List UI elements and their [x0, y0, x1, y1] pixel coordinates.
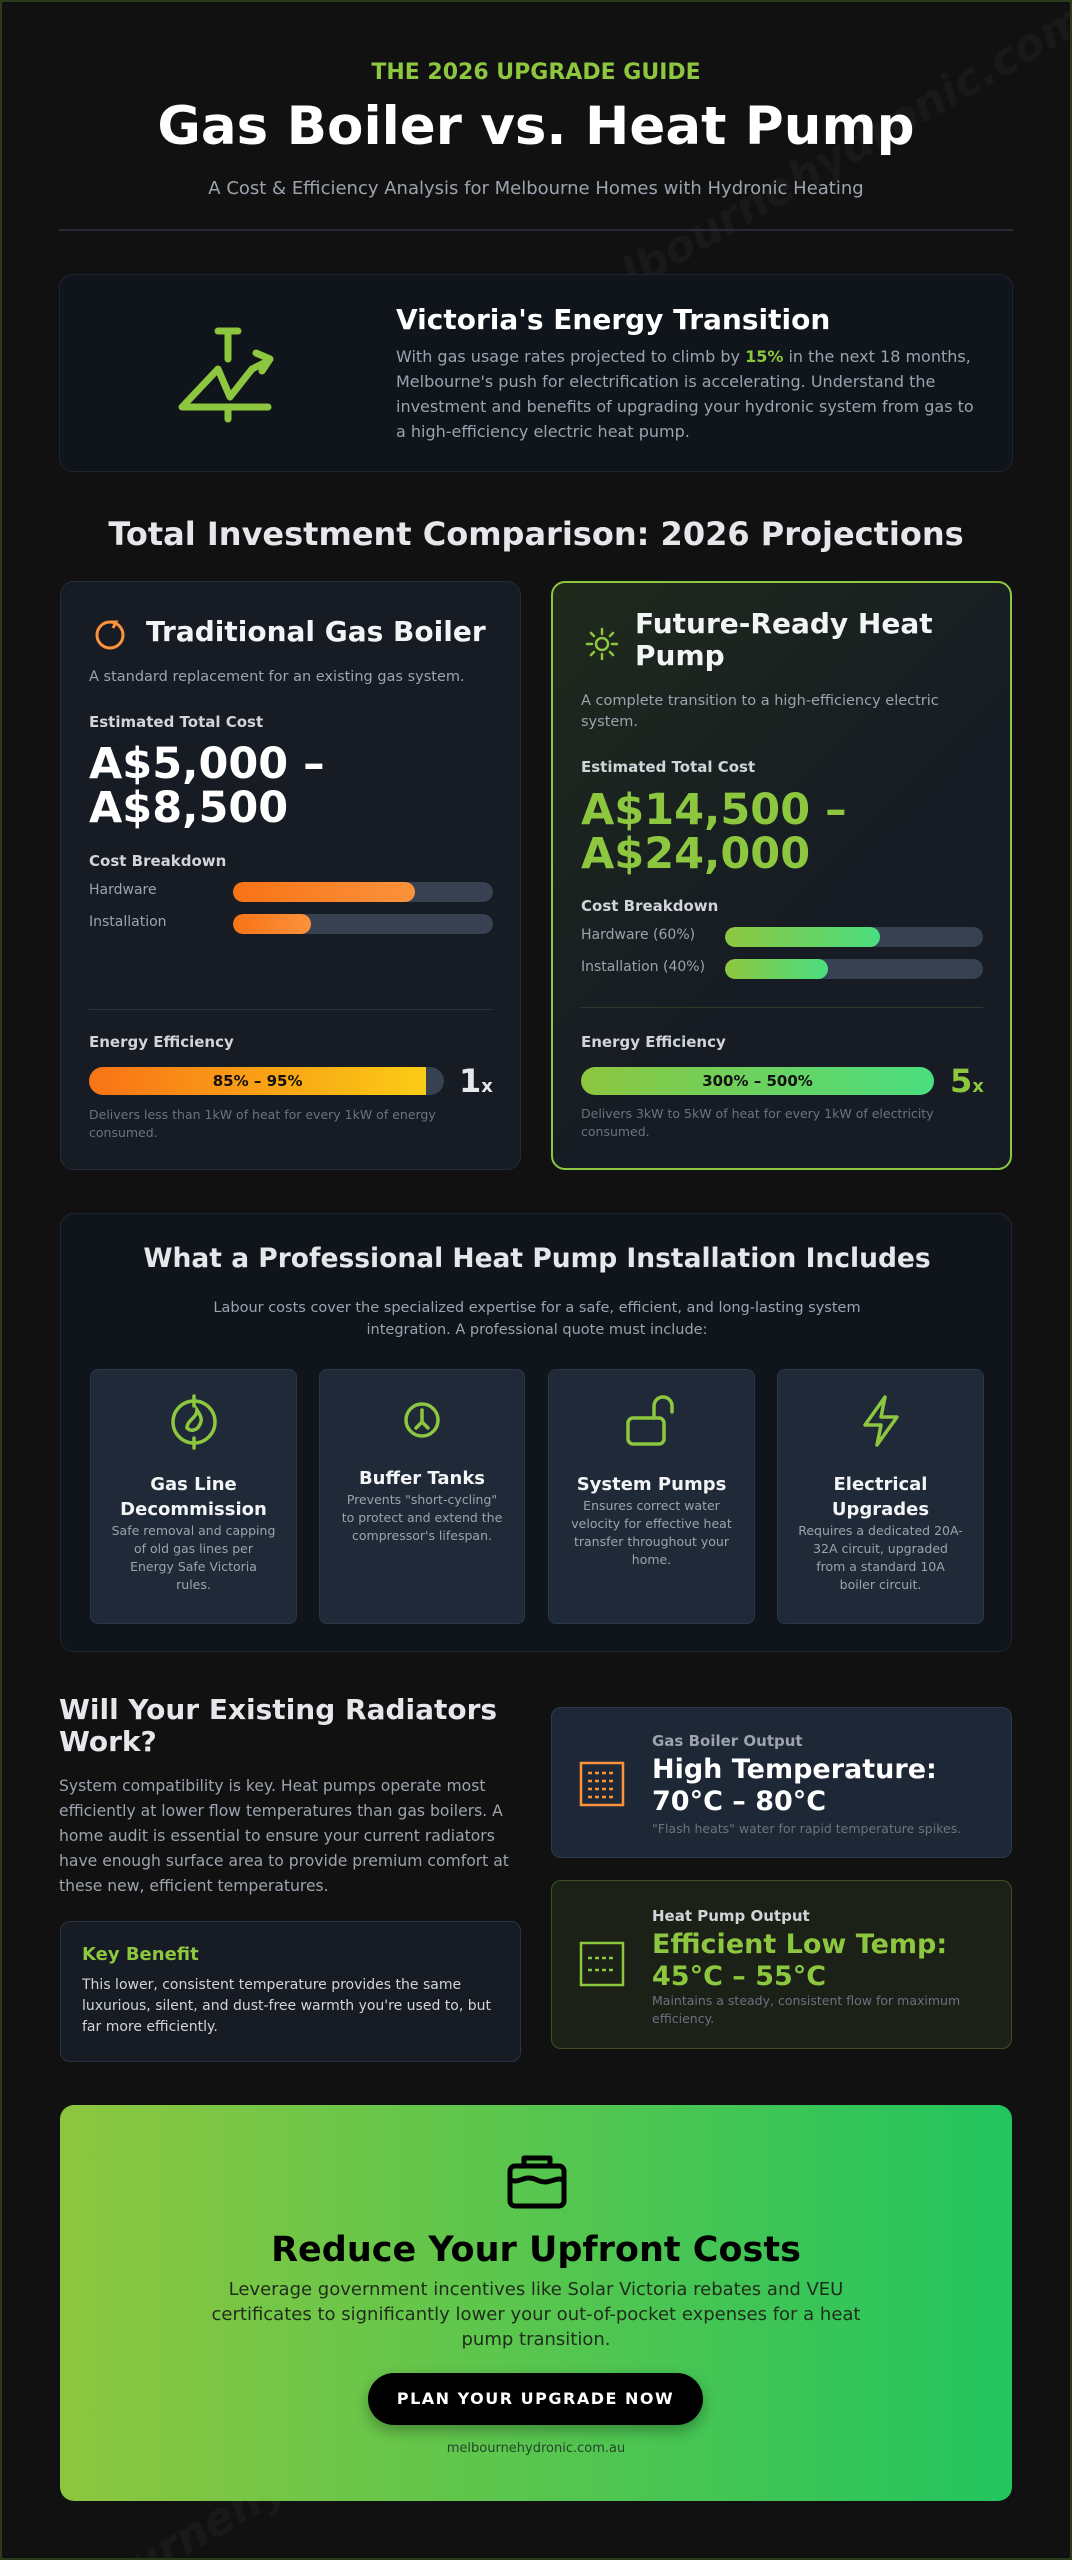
radiators body: System compatibility is key. Heat pumps operate most efficiently at lower flow temperatures than gas boilers. A home audit is essential to ensure your current radiators have enough surface area to provide premium comfort at these new, efficient temperatures.	[59, 1777, 509, 1895]
price: A$5,000 –	[89, 739, 325, 789]
panel: gas boiler output: Gas Boiler Output	[652, 1732, 803, 1750]
panel: gas boiler: Energy Efficiency	[89, 1033, 234, 1051]
callout: key benefit	[60, 1921, 521, 2062]
icon: radiator low	[580, 1942, 624, 1986]
panel: heat pump: Energy Efficiency	[581, 1033, 726, 1051]
card: buffer tanks: Prevents "short-cycling" to protect and extend the compressor's lifespan.	[342, 1492, 502, 1543]
panel: CTA	[60, 2105, 1012, 2501]
callout: key benefit: Key Benefit	[82, 1944, 199, 1965]
panel: heat pump: Cost Breakdown	[581, 897, 718, 915]
icon: radiator hot	[580, 1762, 624, 1806]
panel: energy transition	[59, 274, 1013, 472]
card: gas line: Gas Line	[150, 1474, 237, 1495]
bar chart: cost breakdown: Installation	[89, 914, 167, 930]
panel: gas boiler: Cost Breakdown	[89, 852, 226, 870]
body text: With gas usage rates projected to climb by 15% in the next 18 months, Melbourne's push for electrification is accelerating. Understand the investment and benefits of upgrading your hydronic system from gas to a high-efficiency electric heat pump.	[396, 347, 974, 441]
card: system pumps: Ensures correct water velocity for effective heat transfer throughout your home.	[571, 1498, 732, 1567]
card: electrical: Electrical	[834, 1474, 927, 1495]
title: Future-Ready Heat Pump	[635, 607, 933, 672]
panel: gas boiler	[60, 581, 521, 1170]
panel: heat pump	[551, 581, 1012, 1170]
panel: heat pump output: Heat Pump Output	[652, 1907, 810, 1925]
panel: gas boiler output: High Temperature:	[652, 1754, 937, 1785]
panel: heat pump output: Efficient Low Temp:	[652, 1929, 947, 1960]
panel: heat pump: 5x	[950, 1062, 984, 1100]
panel: heat pump output: Maintains a steady, consistent flow for maximum efficiency.	[652, 1993, 960, 2026]
icon: pump lock	[626, 1395, 674, 1446]
callout: key benefit: This lower, consistent temperature provides the same luxurious, silent, and dust-free warmth you're used to, but far more efficiently.	[82, 1977, 491, 2035]
title: Traditional Gas Boiler	[146, 615, 486, 648]
card: gas line	[90, 1369, 297, 1624]
heading: Victoria's Energy Transition	[396, 303, 830, 336]
card: electrical: Requires a dedicated 20A-32A circuit, upgraded from a standard 10A boiler circuit.	[798, 1523, 963, 1592]
bar chart: cost breakdown: Hardware	[89, 882, 157, 898]
panel: installation includes: Labour costs cover the specialized expertise for a safe, efficient, and long-lasting system integration. A professional quote must include:	[213, 1300, 861, 1338]
panel: gas boiler output: "Flash heats" water for rapid temperature spikes.	[652, 1821, 961, 1836]
price	[581, 785, 847, 879]
price: A$8,500	[89, 783, 288, 833]
panel: gas boiler output: 70°C – 80°C	[652, 1786, 826, 1817]
panel: heat pump: Estimated Total Cost	[581, 758, 755, 776]
panel: gas boiler: 1x	[459, 1062, 493, 1100]
bar chart: cost breakdown: Hardware (60%)	[581, 927, 695, 943]
panel: heat pump output: 45°C – 55°C	[652, 1961, 826, 1992]
card: electrical	[777, 1369, 984, 1624]
panel: gas boiler: A standard replacement for an existing gas system.	[89, 669, 465, 685]
heading: What a Professional Heat Pump Installation Includes	[143, 1243, 931, 1274]
icon: flame	[96, 620, 124, 650]
icon: sun	[586, 628, 618, 660]
card: buffer tanks: Buffer Tanks	[359, 1468, 485, 1489]
efficiency bar	[581, 1067, 934, 1095]
panel: installation includes	[60, 1213, 1012, 1652]
panel: gas boiler: Estimated Total Cost	[89, 713, 263, 731]
icon: trend chart	[178, 328, 274, 422]
card: electrical: Upgrades	[832, 1499, 929, 1520]
efficiency bar: 85% – 95%	[213, 1072, 302, 1090]
eyebrow: THE 2026 UPGRADE GUIDE	[371, 60, 701, 85]
icon: gas line	[171, 1394, 217, 1450]
section heading: comparison: Total Investment Comparison: 2026 Projections	[108, 515, 964, 553]
panel: heat pump: Delivers 3kW to 5kW of heat for every 1kW of electricity consumed.	[581, 1106, 934, 1139]
card: gas line: Decommission	[120, 1499, 267, 1520]
panel: gas boiler output	[551, 1707, 1012, 1858]
button: PLAN YOUR UPGRADE NOW	[397, 2389, 674, 2408]
subtitle: A Cost & Efficiency Analysis for Melbourne Homes with Hydronic Heating	[208, 178, 864, 199]
price: A$24,000	[581, 829, 810, 879]
icon: toolbox	[508, 2156, 566, 2208]
icon: gauge	[404, 1402, 440, 1438]
card: system pumps: System Pumps	[577, 1474, 726, 1495]
price: A$14,500 –	[581, 785, 847, 835]
card: gas line: Safe removal and capping of old gas lines per Energy Safe Victoria rules.	[112, 1523, 275, 1592]
icon: lightning	[863, 1395, 899, 1447]
efficiency bar: 300% – 500%	[702, 1072, 813, 1090]
panel: CTA: Leverage government incentives like Solar Victoria rebates and VEU certificates to significantly lower your out-of-pocket expenses for a heat pump transition.	[212, 2279, 860, 2350]
price	[89, 739, 325, 833]
card: buffer tanks	[319, 1369, 525, 1624]
bar chart: cost breakdown	[581, 927, 983, 979]
efficiency bar	[89, 1067, 444, 1095]
panel: CTA: melbournehydronic.com.au	[447, 2441, 625, 2456]
bar chart: cost breakdown: Installation (40%)	[581, 959, 705, 975]
radiators heading: Will Your Existing Radiators Work?	[59, 1693, 497, 1758]
card: system pumps	[548, 1369, 755, 1624]
heading: Reduce Your Upfront Costs	[271, 2230, 801, 2270]
title: Gas Boiler vs. Heat Pump	[157, 96, 915, 157]
button	[368, 2373, 703, 2425]
panel: heat pump output	[551, 1880, 1012, 2049]
bar chart: cost breakdown	[89, 882, 493, 934]
panel: heat pump: A complete transition to a high-efficiency electric system.	[581, 693, 939, 730]
panel: gas boiler: Delivers less than 1kW of heat for every 1kW of energy consumed.	[89, 1107, 436, 1140]
